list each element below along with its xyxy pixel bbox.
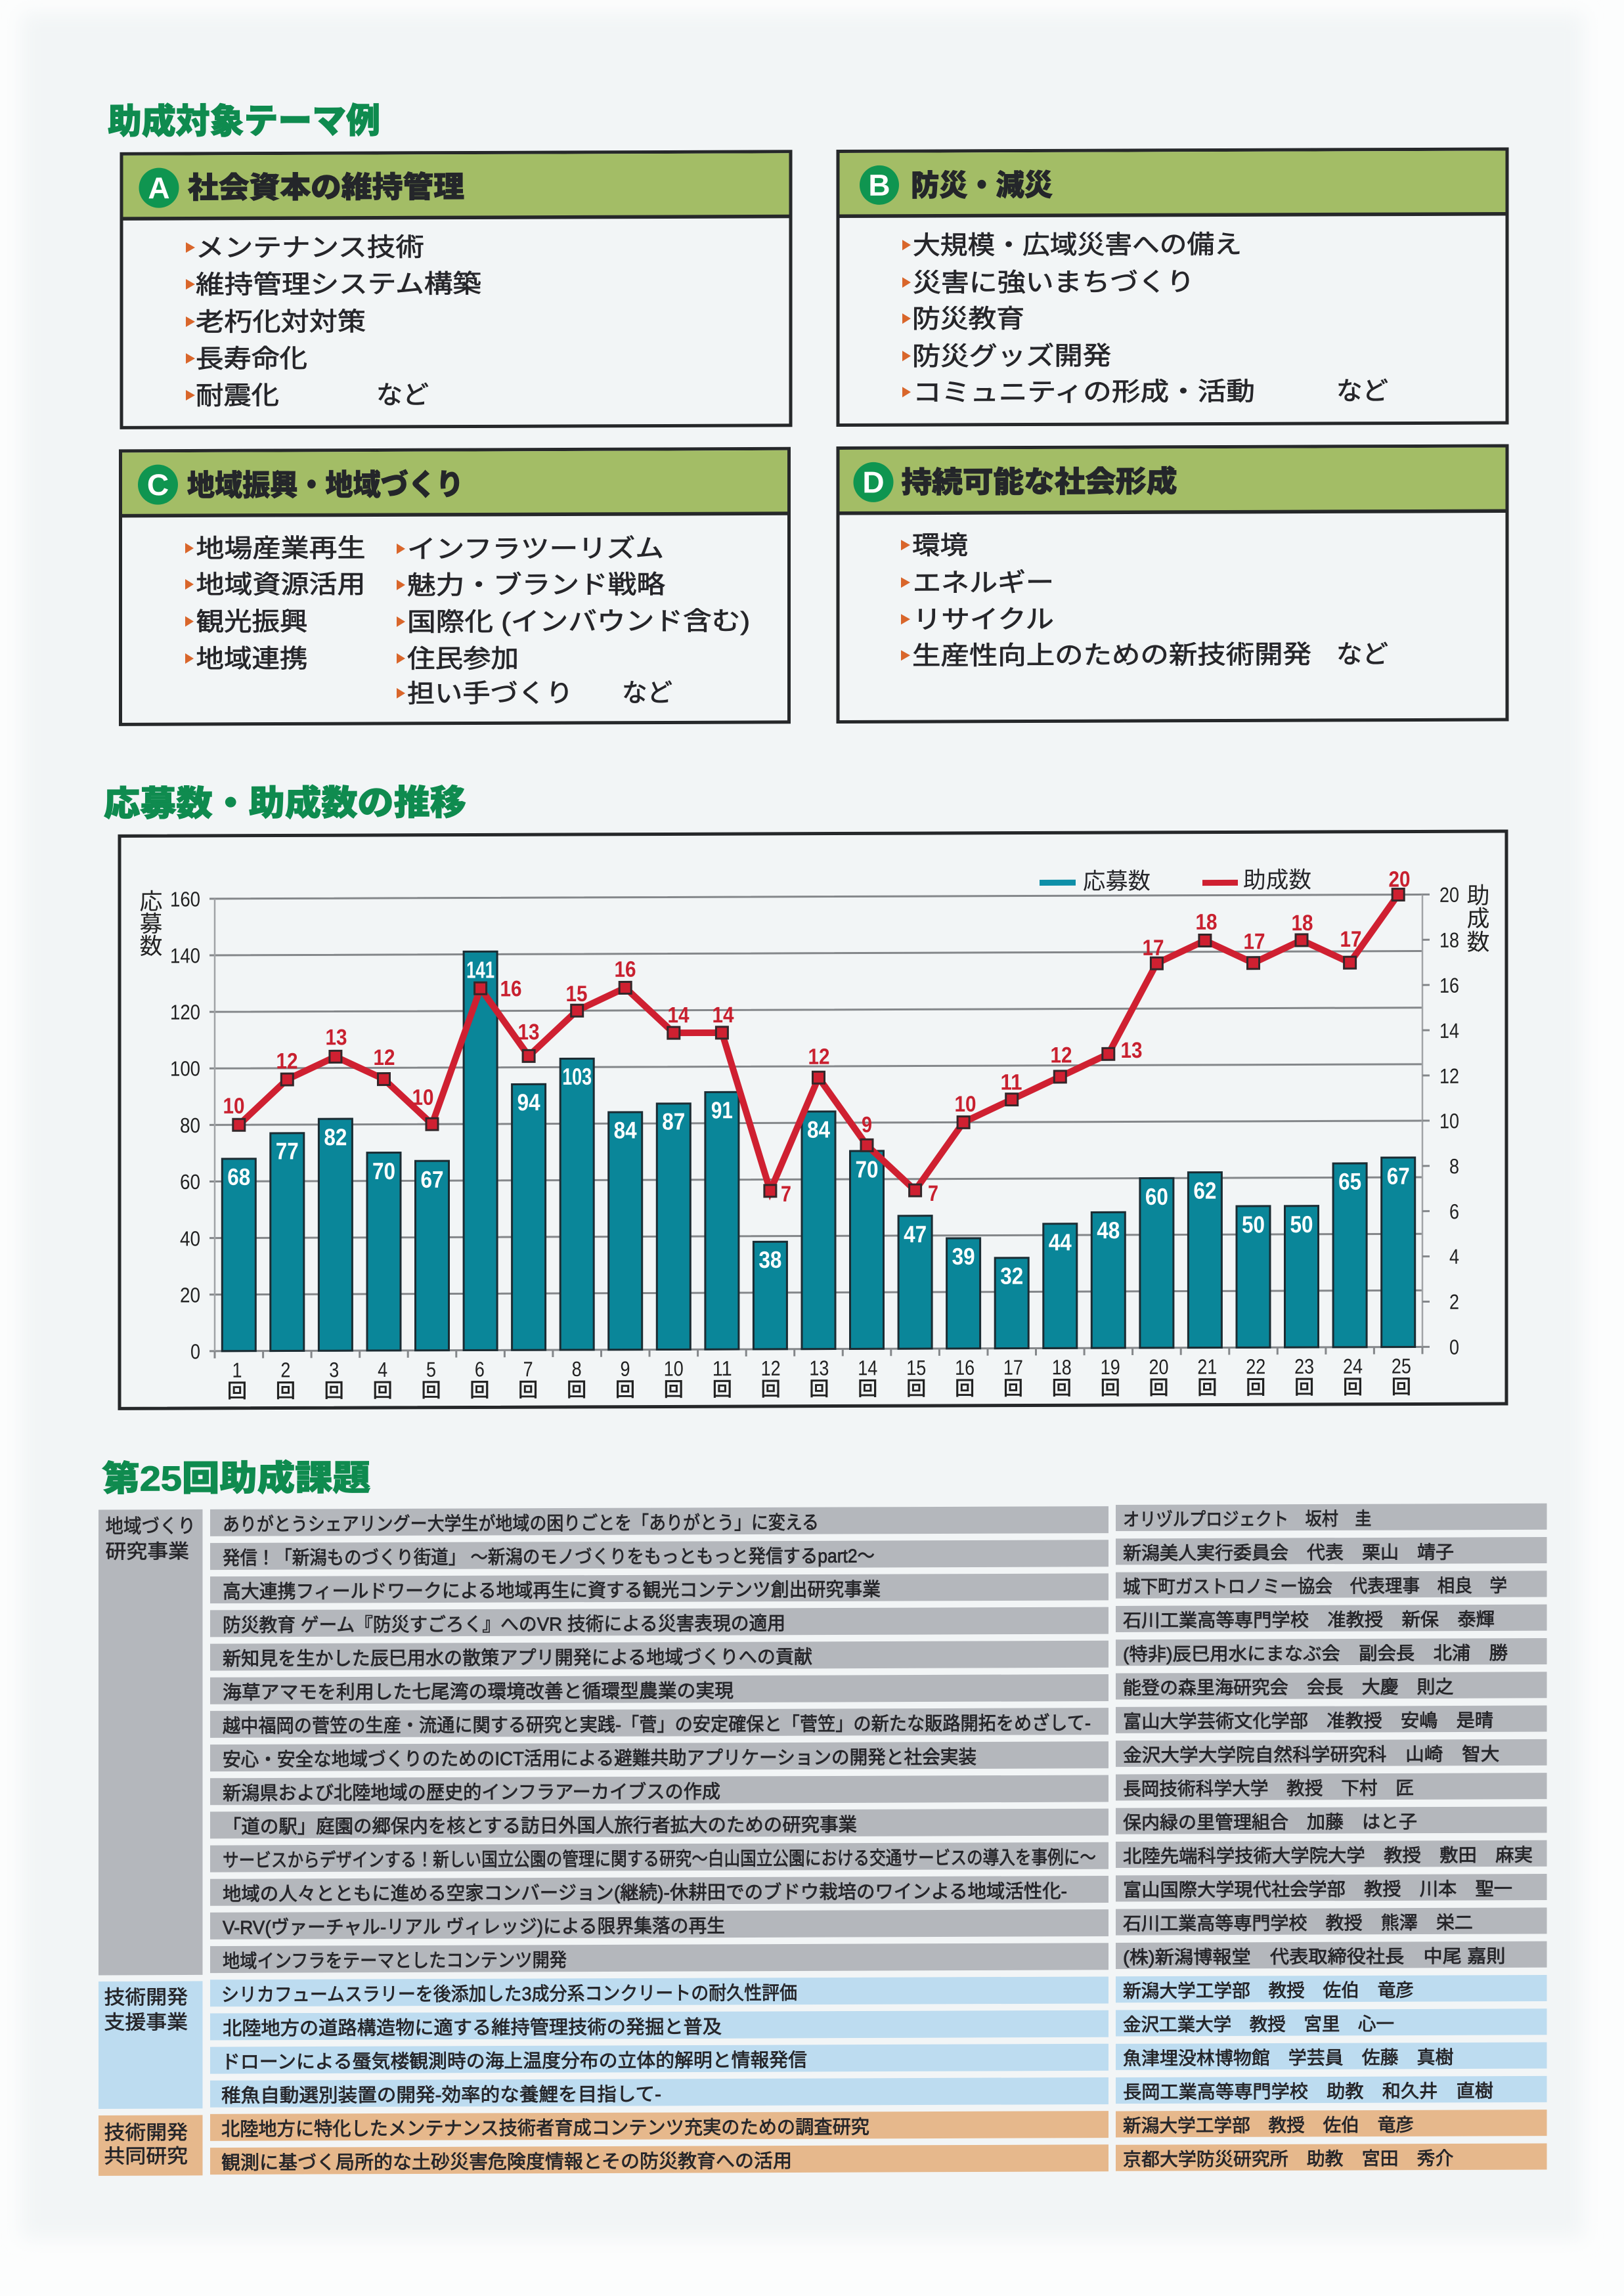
left axis labels 応募数: 応: [139, 889, 163, 915]
table row 16: 金沢工業大学 教授 宮里 心一: [1123, 2014, 1394, 2035]
panel: A 社会資本の維持管理: [121, 152, 791, 427]
x axis labels 回: 回: [1003, 1378, 1023, 1400]
panel: C 地域振興・地域づくり: 地場産業再生: [196, 534, 365, 563]
line value labels: 17: [1244, 929, 1265, 954]
panel: A 社会資本の維持管理: 長寿命化: [196, 345, 307, 374]
line value labels: 16: [614, 957, 636, 982]
table category: 技術開発共同研究: 技術開発: [104, 2122, 188, 2144]
bar value labels: 70: [372, 1158, 395, 1184]
x axis labels 回: 回: [809, 1379, 829, 1400]
right axis labels 助成数: 数: [1466, 930, 1490, 955]
panel: B 防災・減災: コミュニティの形成・活動: [913, 378, 1255, 407]
table row 19: 新潟大学工学部 教授 佐伯 竜彦: [1123, 2115, 1414, 2136]
line value labels: 17: [1340, 927, 1361, 952]
left axis labels 応募数: 募: [139, 911, 163, 937]
panel: combo chart: [120, 831, 1506, 1408]
line value labels: 10: [954, 1092, 976, 1117]
table row 10: 「道の駅」庭園の郷保内を核とする訪日外国人旅行者拡大のための研究事業: [223, 1814, 857, 1838]
table row 18: 長岡工業高等専門学校 助教 和久井 直樹: [1123, 2081, 1493, 2102]
panel: A 社会資本の維持管理: など: [376, 381, 429, 410]
bar value labels: 38: [758, 1246, 781, 1273]
table row 17: [210, 2042, 1547, 2074]
table category: 技術開発支援事業: 技術開発: [104, 1987, 188, 2008]
x axis labels 回: 回: [858, 1378, 877, 1400]
right axis labels 助成数: 10: [1439, 1109, 1459, 1133]
chart gridlines and axes: [209, 894, 1430, 1358]
table row 16: [210, 2008, 1547, 2040]
panel: C 地域振興・地域づくり: 住民参加: [407, 645, 519, 674]
table row 15: [210, 1975, 1547, 2006]
line value labels: 18: [1195, 910, 1218, 935]
table row 14: (株)新潟博報堂 代表取締役社長 中尾 嘉則: [1123, 1946, 1505, 1968]
right axis labels 助成数: 2: [1449, 1290, 1459, 1314]
table row 5: [210, 1638, 1547, 1671]
x axis labels 回: 回: [324, 1380, 344, 1402]
x axis labels 回: 20: [1149, 1355, 1169, 1379]
x axis labels 回: 回: [1294, 1377, 1314, 1398]
panel: B 防災・減災: [838, 149, 1507, 425]
line value labels: 9: [862, 1112, 872, 1137]
x axis labels 回: 23: [1294, 1354, 1314, 1378]
x axis labels 回: 13: [809, 1356, 829, 1380]
heading: 応募数・助成数の推移: 応募数・助成数の推移: [104, 783, 466, 823]
panel: C 地域振興・地域づくり: [121, 448, 789, 724]
right axis labels 助成数: 4: [1449, 1245, 1459, 1268]
x axis labels 回: 17: [1003, 1356, 1023, 1379]
line value labels: 12: [1050, 1043, 1072, 1068]
left axis labels 応募数: 140: [170, 943, 200, 968]
bar value labels: 48: [1097, 1217, 1120, 1244]
table row 15: 新潟大学工学部 教授 佐伯 竜彦: [1123, 1980, 1414, 2001]
right axis labels 助成数: 20: [1439, 883, 1459, 907]
panel: B 防災・減災: B: [868, 168, 890, 202]
heading: 第25回助成課題: 第25回助成課題: [102, 1458, 370, 1498]
panel: C 地域振興・地域づくり: インフラツーリズム: [407, 534, 664, 564]
x axis labels 回: 回: [422, 1380, 441, 1402]
x axis labels 回: 回: [615, 1379, 635, 1401]
bar value labels: 87: [662, 1108, 685, 1135]
table row 20: 観測に基づく局所的な土砂災害危険度情報とその防災教育への活用: [221, 2150, 792, 2174]
x axis labels 回: 24: [1343, 1354, 1363, 1378]
x axis labels 回: 7: [523, 1357, 533, 1381]
panel: D 持続可能な社会形成: エネルギー: [913, 569, 1054, 597]
table row 3: 城下町ガストロノミー協会 代表理事 相良 学: [1123, 1576, 1507, 1597]
table row 18: 稚魚自動選別装置の開発-効率的な養鯉を目指して-: [221, 2083, 661, 2107]
x axis labels 回: 回: [1197, 1377, 1217, 1399]
table row 5: (特非)辰巳用水にまなぶ会 副会長 北浦 勝: [1123, 1643, 1508, 1664]
bar value labels: 50: [1242, 1211, 1265, 1238]
line value labels: 13: [1121, 1038, 1143, 1063]
panel: B 防災・減災: 防災グッズ開発: [912, 342, 1111, 371]
panel: C 地域振興・地域づくり: 魅力・ブランド戦略: [407, 571, 665, 600]
right axis labels 助成数: 14: [1439, 1019, 1459, 1043]
panel: B 防災・減災: 防災教育: [912, 305, 1024, 334]
left axis labels 応募数: 100: [170, 1056, 200, 1081]
table row 14: [210, 1941, 1547, 1973]
line value labels: 13: [517, 1020, 540, 1045]
x axis labels 回: 回: [567, 1379, 586, 1401]
panel: D 持続可能な社会形成: D: [862, 465, 885, 499]
line value labels: 12: [808, 1045, 830, 1070]
panel: D 持続可能な社会形成: 生産性向上のための新技術開発: [912, 641, 1311, 670]
line value labels: 16: [500, 976, 522, 1001]
panel: B 防災・減災: 防災・減災: [911, 168, 1053, 202]
table row 12: [210, 1874, 1547, 1906]
panel: C 地域振興・地域づくり: 観光振興: [196, 608, 308, 636]
chart legend: [1040, 867, 1311, 894]
left axis labels 応募数: 80: [180, 1114, 200, 1137]
title: 助成対象テーマ例: 助成対象テーマ例: [108, 101, 380, 141]
left axis labels 応募数: 0: [190, 1339, 200, 1363]
chart legend: 応募数: [1083, 869, 1151, 894]
x axis labels 回: 22: [1246, 1354, 1265, 1378]
table row 3: 高大連携フィールドワークによる地域再生に資する観光コンテンツ創出研究事業: [223, 1579, 881, 1603]
x axis labels 回: 回: [1149, 1377, 1169, 1399]
right axis labels 助成数: 成: [1466, 906, 1490, 932]
x axis labels 回: 2: [280, 1358, 290, 1382]
panel: B 防災・減災: 大規模・広域災害への備え: [913, 230, 1242, 260]
table row 8: [210, 1739, 1547, 1771]
table row 2: [210, 1537, 1547, 1570]
right axis labels 助成数: 18: [1439, 928, 1459, 952]
table row 19: [210, 2110, 1547, 2141]
panel: C 地域振興・地域づくり: 国際化 (インバウンド含む): [407, 607, 750, 637]
bar value labels: 60: [1145, 1183, 1168, 1210]
line value labels: 7: [781, 1182, 791, 1207]
table row 11: [210, 1840, 1547, 1873]
x axis labels 回: 回: [906, 1378, 926, 1400]
table row 5: 新知見を生かした辰巳用水の散策アプリ開発による地域づくりへの貢献: [223, 1646, 812, 1670]
table row 13: [210, 1907, 1547, 1939]
x axis labels 回: 回: [761, 1379, 781, 1400]
table category: 技術開発支援事業: [99, 1981, 202, 2109]
panel: D 持続可能な社会形成: 持続可能な社会形成: [901, 465, 1177, 499]
table row 12: 富山国際大学現代社会学部 教授 川本 聖一: [1123, 1878, 1512, 1900]
table row 10: [210, 1806, 1547, 1838]
table row 15: シリカフュームスラリーを後添加した3成分系コンクリートの耐久性評価: [221, 1982, 797, 2006]
left axis labels 応募数: 120: [170, 1000, 200, 1024]
x axis labels 回: 10: [664, 1356, 684, 1380]
table row 1: [210, 1504, 1547, 1536]
x axis labels 回: 回: [373, 1380, 393, 1402]
table row 4: 石川工業高等専門学校 准教授 新保 泰輝: [1123, 1609, 1495, 1631]
bar value labels: 84: [614, 1117, 637, 1144]
panel: C 地域振興・地域づくり: 地域連携: [196, 645, 308, 674]
table row 9: [210, 1773, 1547, 1805]
table category: 技術開発支援事業: 支援事業: [104, 2012, 188, 2033]
bar value labels: 67: [420, 1166, 443, 1193]
right axis labels 助成数: [1439, 883, 1490, 1359]
line value labels: 12: [373, 1045, 395, 1070]
x axis labels 回: 15: [906, 1356, 926, 1379]
panel: D 持続可能な社会形成: 環境: [912, 532, 968, 560]
table category: 技術開発共同研究: [99, 2115, 202, 2176]
x axis labels 回: 9: [620, 1357, 630, 1381]
bars: 応募数: [222, 948, 1415, 1351]
line value labels: 20: [1388, 867, 1410, 892]
table row 8: 安心・安全な地域づくりのためのICT活用による避難共助アプリケーションの開発と社会実装: [223, 1746, 977, 1771]
panel: A 社会資本の維持管理: 老朽化対対策: [196, 308, 366, 337]
x axis labels 回: 25: [1392, 1354, 1411, 1378]
line value labels: 15: [566, 982, 588, 1007]
table row 11: 北陸先端科学技術大学院大学 教授 敷田 麻実: [1123, 1845, 1533, 1867]
bar value labels: 141: [466, 956, 494, 984]
panel: D 持続可能な社会形成: [838, 446, 1507, 722]
line value labels: 10: [412, 1085, 434, 1110]
table row 13: 石川工業高等専門学校 教授 熊澤 栄二: [1123, 1913, 1473, 1934]
bar value labels: 103: [562, 1063, 592, 1090]
x axis labels 回: 12: [761, 1356, 781, 1380]
panel: B 防災・減災: 災害に強いまちづくり: [913, 269, 1195, 297]
panel: C 地域振興・地域づくり: 担い手づくり: [407, 680, 573, 708]
bar value labels: 70: [856, 1156, 879, 1182]
table row 19: 北陸地方に特化したメンテナンス技術者育成コンテンツ充実のための調査研究: [221, 2116, 869, 2140]
x axis labels 回: 回: [1246, 1377, 1265, 1398]
x axis labels 回: 回: [1052, 1377, 1072, 1399]
panel: C 地域振興・地域づくり: C: [147, 467, 169, 502]
bar value labels: 65: [1338, 1168, 1361, 1195]
table row 1: オリヅルプロジェクト 坂村 圭: [1123, 1509, 1371, 1530]
table row 7: [210, 1706, 1547, 1738]
bar value labels: 94: [517, 1089, 540, 1116]
table row 14: 地域インフラをテーマとしたコンテンツ開発: [223, 1949, 567, 1972]
x axis labels 回: 回: [227, 1381, 247, 1402]
line value labels: [223, 867, 1411, 1209]
panel: A 社会資本の維持管理: A: [148, 171, 170, 205]
x axis labels 回: 回: [1392, 1376, 1411, 1398]
left axis labels 応募数: 20: [180, 1283, 200, 1307]
table category: 地域づくり研究事業: 研究事業: [105, 1541, 189, 1563]
table row 9: 長岡技術科学大学 教授 下村 匠: [1123, 1778, 1414, 1799]
left axis labels 応募数: 160: [170, 887, 200, 911]
table row 20: 京都大学防災研究所 助教 宮田 秀介: [1123, 2148, 1454, 2170]
line value labels: 13: [326, 1025, 347, 1050]
panel: A 社会資本の維持管理: メンテナンス技術: [196, 234, 424, 263]
panel: A 社会資本の維持管理: 耐震化: [196, 382, 279, 410]
x axis labels 回: 5: [426, 1358, 436, 1381]
bar value labels: 32: [1000, 1263, 1023, 1289]
bar value labels: 47: [904, 1221, 927, 1247]
bar value labels: 62: [1193, 1177, 1216, 1204]
panel: D 持続可能な社会形成: リサイクル: [913, 605, 1054, 634]
left axis labels 応募数: 40: [180, 1226, 200, 1251]
right axis labels 助成数: 8: [1449, 1154, 1459, 1178]
line value labels: 7: [928, 1181, 938, 1206]
line value labels: 11: [1000, 1070, 1022, 1095]
right axis labels 助成数: 0: [1449, 1335, 1459, 1359]
x axis labels 回: 19: [1101, 1355, 1120, 1379]
table row 17: 魚津埋没林博物館 学芸員 佐藤 真樹: [1123, 2047, 1454, 2069]
table row 13: V-RV(ヴァーチャル-リアル ヴィレッジ)による限界集落の再生: [223, 1915, 725, 1939]
x axis labels 回: [227, 1354, 1411, 1402]
table row 18: [210, 2076, 1547, 2108]
line markers: [233, 889, 1404, 1199]
panel: A 社会資本の維持管理: 社会資本の維持管理: [188, 170, 464, 204]
x axis labels 回: 21: [1197, 1355, 1217, 1379]
x axis labels 回: 16: [955, 1356, 975, 1379]
x axis labels 回: 3: [329, 1358, 339, 1381]
x axis labels 回: 回: [1101, 1377, 1120, 1399]
line value labels: 12: [276, 1049, 297, 1074]
table row 4: [210, 1605, 1547, 1637]
line value labels: 14: [667, 1003, 690, 1028]
table row 17: ドローンによる蜃気楼観測時の海上温度分布の立体的解明と情報発信: [221, 2049, 807, 2073]
x axis labels 回: 回: [276, 1380, 296, 1402]
panel: C 地域振興・地域づくり: など: [622, 679, 672, 708]
table row 1: ありがとうシェアリングー大学生が地域の困りごとを「ありがとう」に変える: [223, 1512, 819, 1536]
panel: A 社会資本の維持管理: 維持管理システム構築: [196, 270, 481, 299]
bar value labels: 50: [1290, 1211, 1313, 1238]
table row 7: 越中福岡の菅笠の生産・流通に関する研究と実践-「菅」の安定確保と「菅笠」の新たな販路開拓をめざして-: [223, 1712, 1091, 1737]
panel: D 持続可能な社会形成: など: [1336, 641, 1388, 669]
x axis labels 回: 回: [470, 1379, 489, 1401]
bar value labels: 39: [952, 1243, 975, 1270]
x axis labels 回: 6: [475, 1357, 485, 1381]
bar value labels: 44: [1049, 1228, 1072, 1255]
bar value labels: 82: [324, 1123, 347, 1150]
line value labels: 17: [1143, 936, 1164, 961]
table category: 地域づくり研究事業: [99, 1509, 202, 1975]
table row 2: 発信！「新潟ものづくり街道」 ～新潟のモノづくりをもっともっと発信するpart2～: [223, 1546, 875, 1569]
line value labels: 10: [223, 1094, 244, 1119]
table row 3: [210, 1570, 1547, 1603]
x axis labels 回: 4: [378, 1358, 387, 1381]
bar value labels: 67: [1387, 1162, 1410, 1190]
table row 12: 地域の人々とともに進める空家コンバージョン(継続)-休耕田でのブドウ栽培のワインよる地域活性化-: [223, 1880, 1067, 1905]
table row 9: 新潟県および北陸地域の歴史的インフラアーカイブスの作成: [223, 1781, 720, 1804]
x axis labels 回: 18: [1052, 1355, 1072, 1379]
bar value labels: [227, 953, 1410, 1292]
table row 11: サービスからデザインする！新しい国立公園の管理に関する研究～白山国立公園における交通サービスの導入を事例に～: [223, 1847, 1096, 1872]
right axis labels 助成数: 助: [1466, 883, 1490, 909]
x axis labels 回: 14: [858, 1356, 877, 1379]
x axis labels 回: 8: [572, 1357, 582, 1381]
x axis labels 回: 回: [1343, 1377, 1363, 1398]
right axis labels 助成数: 12: [1439, 1064, 1459, 1088]
table row 6: 能登の森里海研究会 会長 大慶 則之: [1123, 1677, 1454, 1699]
line value labels: 14: [712, 1003, 734, 1028]
panel: C 地域振興・地域づくり: 地域資源活用: [196, 571, 365, 599]
table category: 技術開発共同研究: 共同研究: [104, 2146, 188, 2167]
left axis labels 応募数: 60: [180, 1170, 200, 1194]
x axis labels 回: 1: [232, 1358, 242, 1382]
table row 6: [210, 1672, 1547, 1704]
panel: C 地域振興・地域づくり: 地域振興・地域づくり: [187, 468, 464, 502]
left axis labels 応募数: 数: [139, 934, 163, 959]
table row 7: 富山大学芸術文化学部 准教授 安嶋 是晴: [1123, 1710, 1493, 1732]
table row 2: 新潟美人実行委員会 代表 栗山 靖子: [1123, 1542, 1454, 1563]
bar value labels: 91: [711, 1096, 733, 1123]
table row 20: [210, 2143, 1547, 2175]
table category: 地域づくり研究事業: 地域づくり: [105, 1515, 196, 1538]
x axis labels 回: 回: [955, 1378, 975, 1400]
table row 4: 防災教育 ゲーム『防災すごろく』へのVR 技術による災害表現の適用: [223, 1613, 785, 1636]
bar value labels: 77: [276, 1137, 299, 1165]
x axis labels 回: 回: [713, 1379, 732, 1400]
chart legend: 助成数: [1243, 867, 1311, 893]
panel: B 防災・減災: など: [1336, 378, 1388, 406]
table row 8: 金沢大学大学院自然科学研究科 山崎 智大: [1123, 1744, 1500, 1765]
bar value labels: 84: [807, 1116, 830, 1143]
table row 16: 北陸地方の道路構造物に適する維持管理技術の発掘と普及: [223, 2016, 722, 2039]
bar value labels: 68: [227, 1163, 250, 1190]
line value labels: 18: [1291, 911, 1313, 936]
table row 10: 保内緑の里管理組合 加藤 はと子: [1123, 1811, 1417, 1833]
x axis labels 回: 回: [664, 1379, 684, 1400]
right axis labels 助成数: 6: [1449, 1200, 1459, 1223]
table row 6: 海草アマモを利用した七尾湾の環境改善と循環型農業の実現: [223, 1680, 734, 1704]
x axis labels 回: 11: [713, 1356, 732, 1380]
right axis labels 助成数: 16: [1439, 974, 1459, 997]
left axis labels 応募数: [139, 887, 200, 1364]
x axis labels 回: 回: [518, 1379, 538, 1401]
line: 助成数: [239, 895, 1398, 1193]
